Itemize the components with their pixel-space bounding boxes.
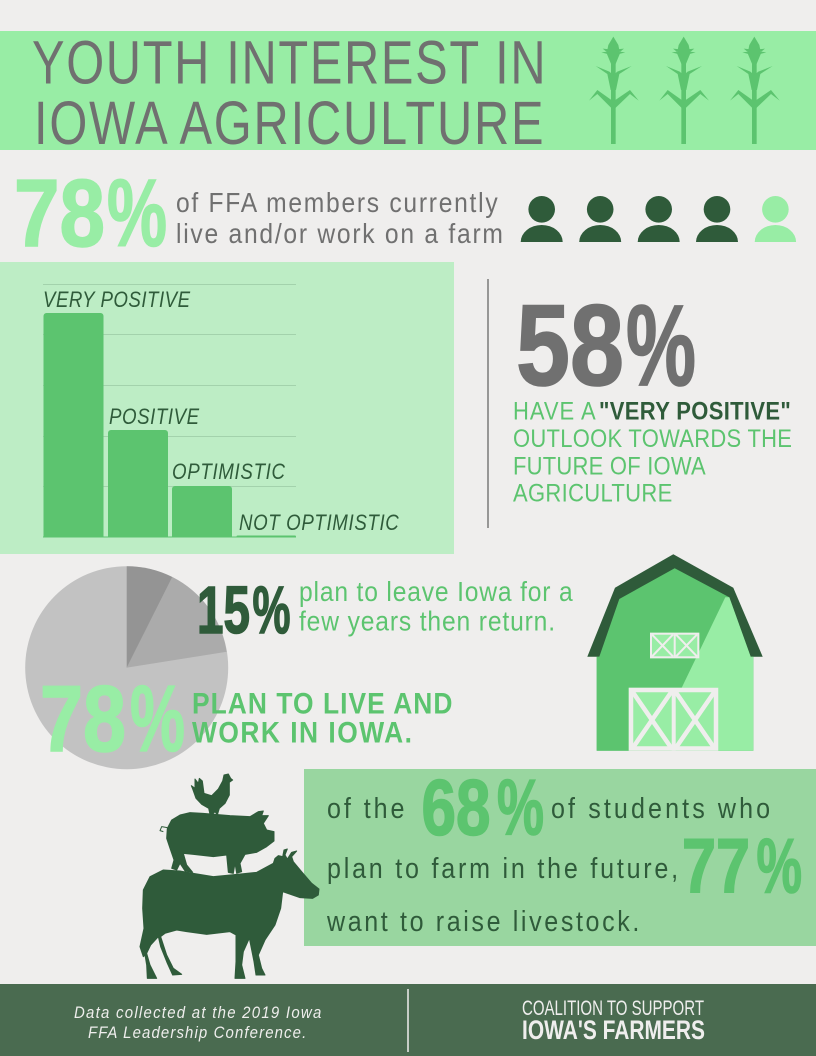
divider bbox=[487, 279, 489, 528]
bar labels: POSITIVE bbox=[109, 406, 199, 429]
live and work text bbox=[192, 686, 452, 749]
title bbox=[32, 28, 546, 157]
coalition logo text: IOWA'S FARMERS bbox=[522, 1015, 705, 1045]
big number: 78% bbox=[14, 160, 167, 267]
big number: 58%: % bbox=[626, 282, 696, 410]
title: YOUTH INTEREST IN bbox=[32, 28, 546, 97]
livestock text bbox=[326, 793, 770, 937]
live and work text: WORK IN IOWA. bbox=[192, 715, 412, 749]
outlook text: "VERY POSITIVE" bbox=[599, 397, 791, 425]
outlook text: HAVE A bbox=[513, 397, 596, 425]
livestock text: plan to farm in the future, bbox=[327, 853, 678, 884]
big number: 68%: 68 bbox=[422, 762, 490, 852]
leave and return text: few years then return. bbox=[299, 605, 555, 637]
bar labels: OPTIMISTIC bbox=[172, 461, 285, 484]
leave and return text bbox=[299, 576, 573, 637]
header banner bbox=[0, 28, 816, 157]
livestock text: want to raise livestock. bbox=[326, 906, 639, 937]
big number: 77%: 77 bbox=[682, 824, 750, 910]
icon: corn stalks bbox=[589, 37, 780, 144]
panel: livestock statistic bbox=[304, 762, 816, 946]
livestock text: of the bbox=[327, 793, 404, 824]
data source note: FFA Leadership Conference. bbox=[88, 1024, 306, 1042]
big number: 15%: 15 bbox=[197, 573, 250, 648]
icon: barn bbox=[587, 554, 763, 751]
bars bbox=[43, 313, 296, 538]
big number: 15%: % bbox=[252, 573, 290, 648]
big number: 78% stay: % bbox=[130, 666, 185, 771]
big number: 58%: 58 bbox=[516, 282, 624, 410]
icon: people, four of five bbox=[521, 196, 796, 242]
panel: outlook bar chart bbox=[0, 262, 454, 554]
coalition logo text bbox=[522, 996, 705, 1045]
data source note bbox=[74, 1004, 321, 1042]
title: IOWA AGRICULTURE bbox=[34, 89, 544, 157]
big number: 78% stay: 78 bbox=[40, 666, 126, 771]
outlook callout bbox=[513, 282, 792, 507]
outlook text: AGRICULTURE bbox=[513, 479, 672, 507]
livestock text: of students who bbox=[551, 793, 770, 824]
coalition logo text: COALITION TO SUPPORT bbox=[522, 996, 704, 1020]
outlook text: FUTURE OF IOWA bbox=[513, 452, 706, 480]
big number: 78%: % bbox=[107, 160, 167, 267]
farm statistic row bbox=[14, 160, 796, 267]
icon: stacked cow, pig and chicken bbox=[140, 774, 319, 978]
pie chart bbox=[25, 566, 228, 769]
farm statistic text: of FFA members currently bbox=[176, 187, 498, 218]
footer bbox=[0, 984, 816, 1056]
farm statistic text bbox=[176, 187, 503, 249]
plans statistics bbox=[40, 573, 573, 771]
outlook text bbox=[513, 397, 792, 507]
bar labels: NOT OPTIMISTIC bbox=[239, 512, 399, 535]
bar labels: VERY POSITIVE bbox=[43, 289, 190, 312]
big number: 68%: % bbox=[497, 762, 544, 852]
farm statistic text: live and/or work on a farm bbox=[176, 218, 503, 249]
big number: 78%: 78 bbox=[14, 160, 105, 267]
leave and return text: plan to leave Iowa for a bbox=[299, 576, 573, 607]
live and work text: PLAN TO LIVE AND bbox=[192, 686, 452, 720]
bar labels bbox=[43, 289, 399, 535]
outlook text: OUTLOOK TOWARDS THE bbox=[513, 425, 792, 452]
data source note: Data collected at the 2019 Iowa bbox=[74, 1004, 321, 1022]
